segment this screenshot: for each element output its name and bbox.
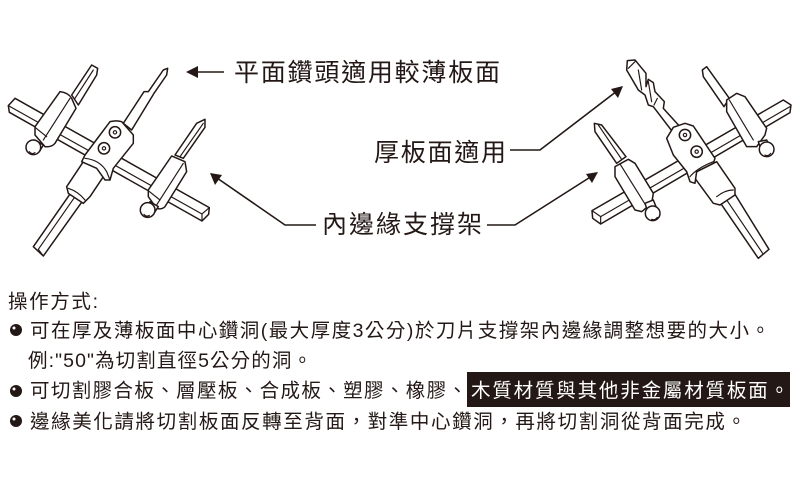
illustration: hole cutter with flat bit [8, 65, 209, 256]
arrow: to drill bit [510, 86, 623, 150]
text: bullet 1 line 1: 可在厚及薄板面中心鑽洞(最大厚度3公分)於刀片支撐架內邊緣調整想要的大小。 [30, 320, 770, 342]
label: inner edge support: 內邊緣支撐架 [322, 211, 482, 239]
label: for thick boards: 厚板面適用 [374, 139, 506, 167]
text: bullet 3: 邊緣美化請將切割板面反轉至背面，對準中心鑽洞，再將切割洞從背面完成。 [30, 411, 746, 433]
highlight box [467, 372, 790, 407]
illustration: hole cutter with drill bit [592, 60, 791, 258]
label: flat bit for thin boards: 平面鑽頭適用較薄板面 [234, 59, 500, 87]
text: bullet 1 line 2: 例:"50"為切割直徑5公分的洞。 [28, 350, 312, 372]
arrow: to left support [210, 173, 316, 225]
bullet 1 [10, 324, 22, 336]
arrow: to flat bit [186, 66, 224, 78]
bullet 3 [10, 415, 22, 427]
text: highlighted materials: 木質材質與其他非金屬材質板面。 [471, 380, 789, 402]
arrow: to right support [487, 172, 598, 225]
text: bullet 2: 可切割膠合板、層壓板、合成板、塑膠、橡膠、 [30, 380, 467, 402]
heading: operating method: 操作方式: [8, 291, 98, 313]
bullet 2 [10, 385, 22, 397]
